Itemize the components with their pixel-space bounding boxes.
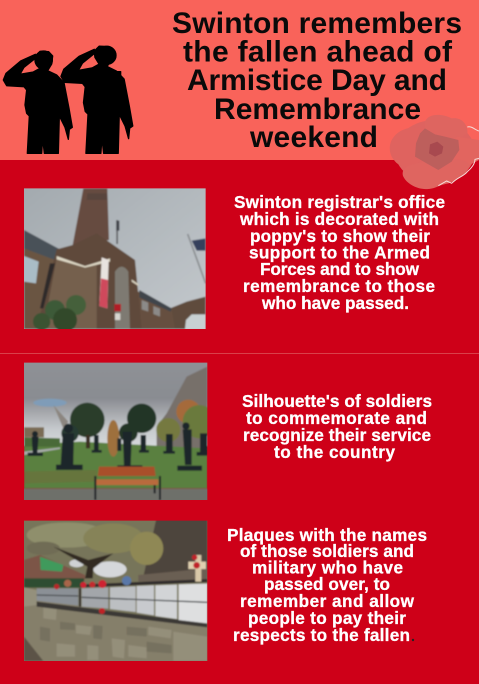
title: Armistice Day and [187, 64, 447, 97]
text: registrar's office caption: who have passed. [261, 293, 409, 313]
title: the fallen ahead of [183, 36, 453, 68]
text: registrar's office caption: Swinton registrar's office [234, 192, 445, 212]
text: plaques caption: people to pay their [248, 608, 406, 628]
stone wall [24, 602, 207, 661]
photo: soldier silhouettes in park with bench [20, 359, 216, 502]
icon: saluting soldiers silhouette [3, 46, 133, 153]
text: registrar's office caption: remembrance to those [243, 276, 435, 296]
text: silhouettes caption: recognize their service [243, 425, 431, 445]
text: registrar's office caption: which is decorated with [239, 209, 439, 229]
text: plaques caption: passed over, to [264, 574, 390, 594]
text: plaques caption: Plaques with the names [227, 525, 427, 545]
title: Swinton remembers [172, 7, 462, 40]
text: silhouettes caption: to commemorate and [246, 408, 427, 428]
plaques [37, 588, 78, 606]
text: plaques caption: military who have [252, 558, 403, 578]
header band [0, 0, 479, 160]
text: silhouettes caption [242, 391, 432, 462]
text: silhouettes caption: Silhouette's of soldiers [242, 391, 432, 411]
text: plaques caption: respects to the fallen [233, 625, 410, 645]
red body background [0, 160, 479, 684]
title: weekend [249, 121, 378, 154]
text: plaques caption [227, 525, 427, 645]
text: registrar's office caption: support to the Armed [249, 242, 430, 262]
text: registrar's office caption: Forces and to show [260, 259, 420, 279]
text: registrar's office caption: poppy's to show their [250, 226, 430, 246]
text: silhouettes caption: to the country [274, 442, 395, 462]
title: Remembrance [214, 93, 421, 126]
photo: Swinton registrar's office building [20, 185, 210, 333]
text: registrar's office caption [234, 192, 445, 313]
text: plaques caption: remember and allow [240, 591, 415, 611]
icon: poppy flower [390, 115, 479, 189]
title [172, 7, 462, 154]
text: plaques caption: of those soldiers and [240, 541, 414, 561]
photo: memorial plaques on stone wall [20, 517, 212, 664]
